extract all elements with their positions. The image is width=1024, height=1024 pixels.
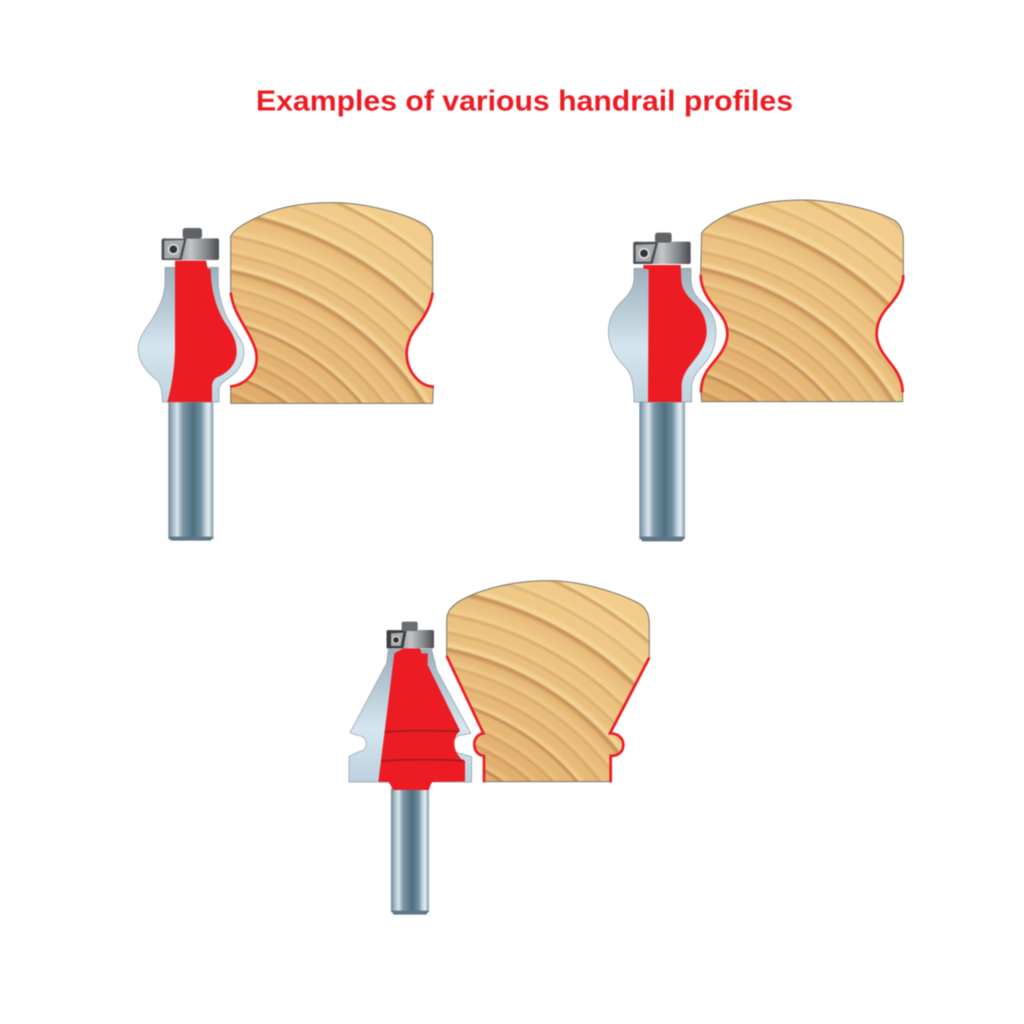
router bit 1 [138, 228, 244, 541]
title: Examples of various handrail profiles [256, 86, 793, 118]
handrail wood section 2 [701, 200, 903, 402]
profile 1: router bit and handrail [138, 203, 434, 541]
profile 2: router bit and handrail [608, 200, 903, 541]
handrail wood section 3 [447, 581, 649, 782]
router bit 3 [349, 622, 472, 915]
profile 3: router bit and handrail [349, 581, 649, 915]
handrail wood section 1 [230, 203, 434, 403]
router bit 2 [608, 233, 716, 541]
